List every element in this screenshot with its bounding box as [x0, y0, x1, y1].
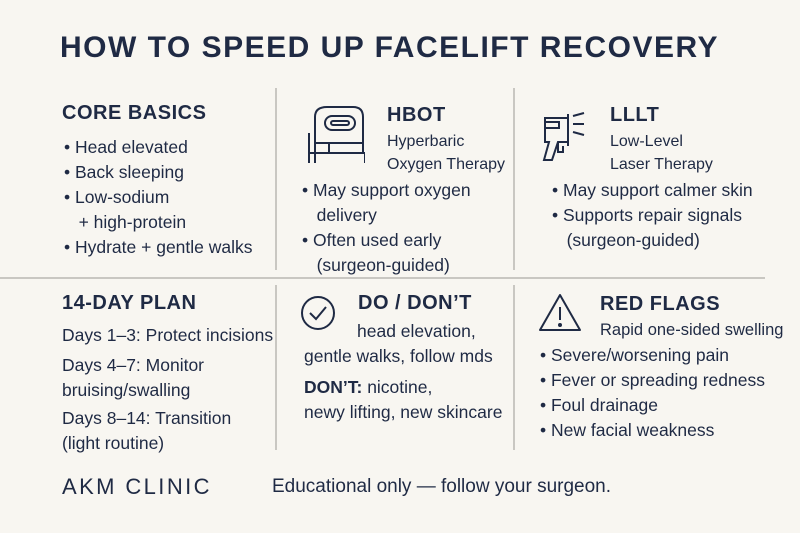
panel: red flags: • Severe/worsening pain: [540, 345, 729, 365]
list: core basics: • Hydrate + gentle walks: [64, 237, 253, 257]
list: • May support oxygen: [302, 180, 471, 200]
panel: 14-day plan: Days 8–14: Transition: [62, 408, 231, 428]
heading: LLLT: LLLT: [610, 104, 659, 126]
title: HOW TO SPEED UP FACELIFT RECOVERY: [60, 31, 719, 64]
heading: HBOT: HBOT: [387, 104, 446, 126]
brand: AKM CLINIC: [62, 474, 212, 499]
do text: head elevation,: [357, 321, 476, 341]
subtitle: [610, 133, 713, 173]
list: • Often used early: [302, 230, 441, 250]
panel: LLLT: [542, 104, 753, 250]
heading: RED FLAGS: [600, 293, 720, 315]
list: core basics: [64, 137, 253, 257]
don't text: newy lifting, new skincare: [304, 402, 502, 422]
do text: [304, 321, 493, 366]
subtitle: Low-Level: [610, 133, 683, 150]
panel: 14-day plan: Days 4–7: Monitor: [62, 355, 204, 375]
icon: laser: [542, 112, 584, 161]
heading: DO / DON’T: [358, 292, 472, 314]
list: (surgeon-guided): [317, 255, 450, 275]
list: Days 1–3: Protect incisions: [62, 325, 273, 345]
list: [552, 180, 753, 250]
list: core basics: + high-protein: [79, 212, 186, 232]
panel: 14-day plan: [62, 292, 273, 453]
disclaimer: Educational only — follow your surgeon.: [272, 476, 611, 497]
panel: 14-day plan: bruising/swalling: [62, 380, 190, 400]
subtitle: Oxygen Therapy: [387, 156, 505, 173]
list: core basics: • Low-sodium: [64, 187, 169, 207]
don't text: [304, 377, 502, 422]
list: [302, 180, 471, 275]
subtitle: [387, 133, 505, 173]
heading: core basics: CORE BASICS: [62, 102, 206, 124]
icon: chamber: [308, 106, 365, 163]
panel: 14-day plan: (light routine): [62, 433, 164, 453]
panel: red flags: • New facial weakness: [540, 420, 714, 440]
list: core basics: • Head elevated: [64, 137, 188, 157]
panel: do/don't: [301, 292, 502, 422]
panel: red flags: [539, 293, 783, 440]
subtitle: Hyperbaric: [387, 133, 464, 150]
icon: warning: [539, 294, 581, 331]
list: • Supports repair signals: [552, 205, 742, 225]
list: (surgeon-guided): [567, 230, 700, 250]
do text: gentle walks, follow mds: [304, 346, 493, 366]
icon: check circle: [301, 296, 335, 330]
panel: core basics: [62, 102, 253, 257]
list: Rapid one-sided swelling: [600, 321, 783, 339]
panel: red flags: • Foul drainage: [540, 395, 658, 415]
list: • May support calmer skin: [552, 180, 753, 200]
list: core basics: • Back sleeping: [64, 162, 184, 182]
subtitle: Laser Therapy: [610, 156, 713, 173]
heading: 14-DAY PLAN: [62, 292, 196, 314]
don't text: DON’T: nicotine,: [304, 377, 432, 397]
panel: red flags: • Fever or spreading redness: [540, 370, 765, 390]
panel: HBOT: [302, 104, 505, 275]
list: delivery: [317, 205, 377, 225]
